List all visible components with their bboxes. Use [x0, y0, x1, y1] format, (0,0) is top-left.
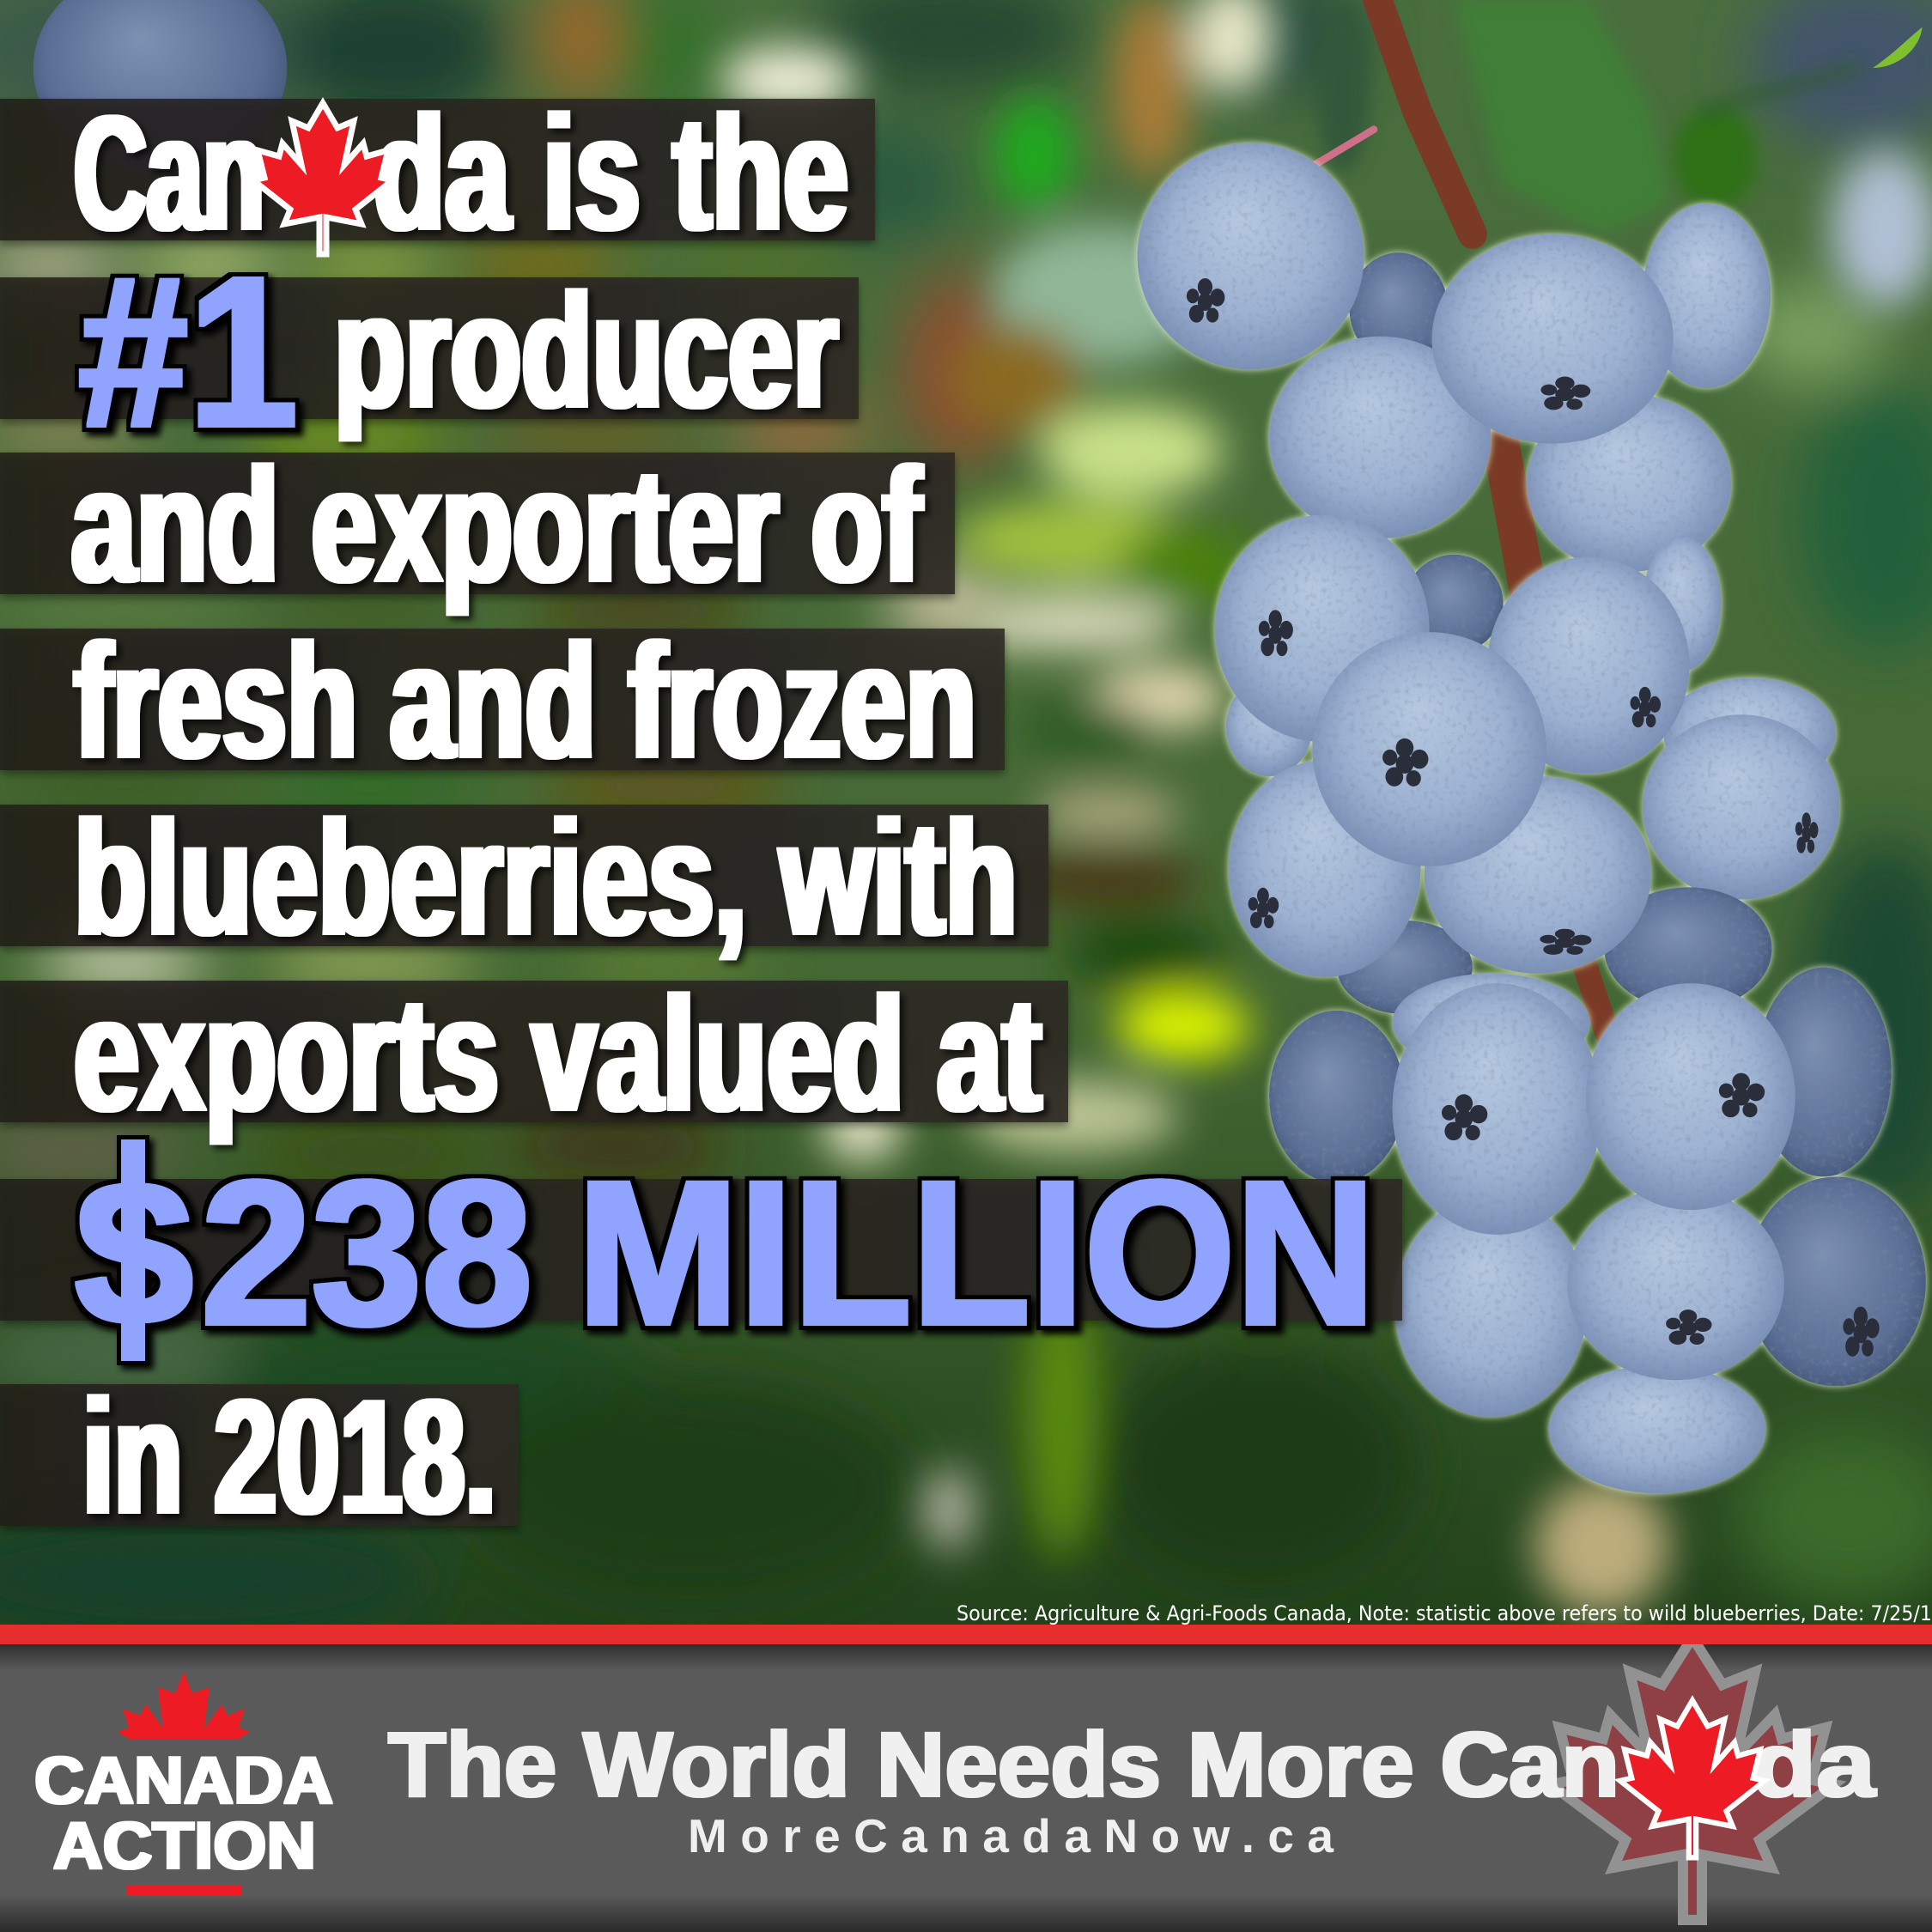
headline line 8: in 2018. — [82, 1366, 496, 1548]
number one rank: #1 — [78, 232, 298, 471]
berry calyx marks — [1187, 278, 1880, 1357]
headline line 7: export value — [0, 1138, 1402, 1368]
berries — [1138, 143, 1926, 1493]
headline line 6: exports valued at — [74, 963, 1042, 1145]
headline line 2 — [0, 232, 859, 471]
tagline: da — [1752, 1712, 1876, 1816]
footer panel — [0, 1625, 1932, 1932]
headline line 7: export value: $ — [75, 1138, 193, 1368]
large faded maple leaf — [1551, 1637, 1834, 1920]
blueberry cluster photo — [33, 0, 1926, 1493]
headline line 4: fresh and frozen — [74, 611, 976, 793]
logo: Canada Action: ACTION — [53, 1807, 316, 1883]
small green leaf — [1873, 27, 1923, 68]
headline line 4 — [0, 611, 1005, 793]
red divider — [0, 1625, 1932, 1644]
top-left berry — [33, 0, 287, 173]
logo: Canada Action — [34, 1672, 333, 1895]
headline line 8 — [0, 1366, 519, 1548]
headline line 7: export value: 238 — [201, 1138, 532, 1368]
headline line 1 — [0, 82, 875, 264]
berry stem — [1312, 0, 1608, 1035]
website url: MoreCanadaNow.ca — [688, 1809, 1334, 1862]
small maple leaf over tagline — [1620, 1700, 1765, 1857]
tagline: The World Needs More Can — [388, 1712, 1619, 1816]
logo: Canada Action: CANADA — [34, 1742, 333, 1818]
headline line 3: and exporter of — [71, 434, 922, 617]
headline line 5: blueberries, with — [74, 787, 1018, 969]
maple leaf icon in headline — [253, 103, 392, 254]
headline line 1: da is the — [374, 82, 848, 264]
headline line 7: export value: MILLION — [577, 1138, 1376, 1368]
headline line 2: producer — [334, 260, 838, 442]
headline line 1: Can — [74, 82, 264, 264]
